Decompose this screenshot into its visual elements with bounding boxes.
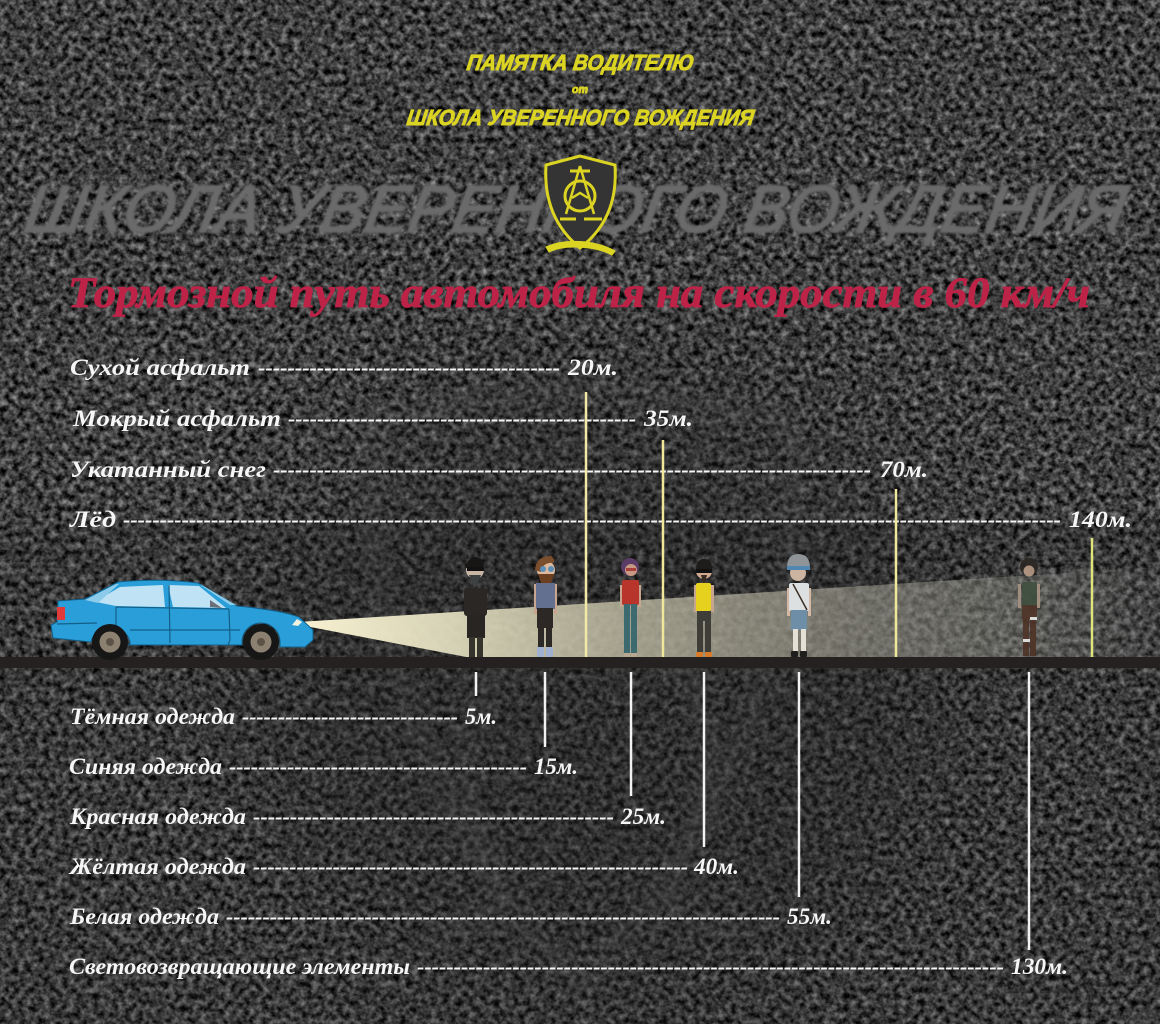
person: white clothing xyxy=(787,554,811,657)
row: packed snow: Укатанный снег xyxy=(70,457,266,483)
row: dark clothing: ------------------------------ xyxy=(242,704,458,730)
row: dark clothing xyxy=(70,704,497,730)
person: blue clothing xyxy=(534,556,557,657)
logo: shield emblem xyxy=(546,156,615,255)
row: packed snow: ---------------------------------------------------------------------------------- xyxy=(273,457,871,483)
heading: driver memo: ПАМЯТКА ВОДИТЕЛЮ xyxy=(465,50,696,75)
row: blue clothing: 15м. xyxy=(534,754,578,780)
title: braking distance at 60 km/h: Тормозной путь автомобиля на скорости в 60 км/ч xyxy=(68,270,1090,317)
row: ice: Лёд xyxy=(69,507,116,533)
person: reflective elements xyxy=(1018,558,1040,656)
list: visibility distance by clothing xyxy=(68,704,1068,980)
row: ice: -------------------------------------------------------------------------------------------------------------------------------- xyxy=(123,507,1061,533)
heading: school name: ШКОЛА УВЕРЕННОГО ВОЖДЕНИЯ xyxy=(405,105,757,130)
row: reflective elements: -------------------------------------------------------------------------------- xyxy=(417,954,1004,980)
headlight beam xyxy=(298,567,1160,660)
heading: from: от xyxy=(572,84,588,96)
row: blue clothing: ----------------------------------------- xyxy=(229,754,527,780)
car xyxy=(51,580,313,660)
row: wet asphalt: 35м. xyxy=(643,406,693,432)
row: white clothing: 55м. xyxy=(787,904,832,930)
row: red clothing: Красная одежда xyxy=(69,804,246,830)
markers: stopping distance lines xyxy=(586,392,1092,657)
row: wet asphalt: Мокрый асфальт xyxy=(72,406,281,432)
row: red clothing xyxy=(69,804,666,830)
person: yellow clothing xyxy=(694,559,714,657)
row: wet asphalt: ------------------------------------------------ xyxy=(288,406,636,432)
row: dry asphalt: 20м. xyxy=(567,355,618,381)
row: dark clothing: 5м. xyxy=(465,704,497,730)
row: reflective elements: 130м. xyxy=(1011,954,1068,980)
row: yellow clothing xyxy=(68,854,739,880)
row: dry asphalt: Сухой асфальт xyxy=(70,355,250,381)
row: dry asphalt: ----------------------------------------- xyxy=(258,355,560,381)
row: white clothing: ---------------------------------------------------------------------------- xyxy=(226,904,780,930)
row: reflective elements: Световозвращающие элементы xyxy=(69,954,410,980)
row: reflective elements xyxy=(69,954,1068,980)
row: white clothing: Белая одежда xyxy=(69,904,219,930)
road xyxy=(0,657,1160,668)
wheel: front xyxy=(243,624,279,660)
row: blue clothing: Синяя одежда xyxy=(69,754,222,780)
row: blue clothing xyxy=(69,754,578,780)
row: dark clothing: Тёмная одежда xyxy=(70,704,235,730)
row: wet asphalt xyxy=(72,406,693,432)
row: yellow clothing: 40м. xyxy=(693,854,739,880)
person: red clothing xyxy=(620,558,641,657)
watermark: faint shield xyxy=(370,385,795,985)
row: packed snow: 70м. xyxy=(880,457,928,483)
person: dark clothing xyxy=(464,557,487,657)
row: red clothing: ------------------------------------------------- xyxy=(253,804,614,830)
wheel: rear xyxy=(92,624,128,660)
row: dry asphalt xyxy=(70,355,618,381)
row: red clothing: 25м. xyxy=(620,804,666,830)
row: yellow clothing: Жёлтая одежда xyxy=(68,854,246,880)
list: braking distance by surface xyxy=(69,355,1132,533)
watermark: school name: ШКОЛА УВЕРЕННОГО ВОЖДЕНИЯ xyxy=(19,172,1133,247)
row: yellow clothing: ------------------------------------------------------------ xyxy=(253,854,688,880)
markers: visibility distance lines xyxy=(476,672,1029,950)
row: ice: 140м. xyxy=(1069,507,1132,533)
